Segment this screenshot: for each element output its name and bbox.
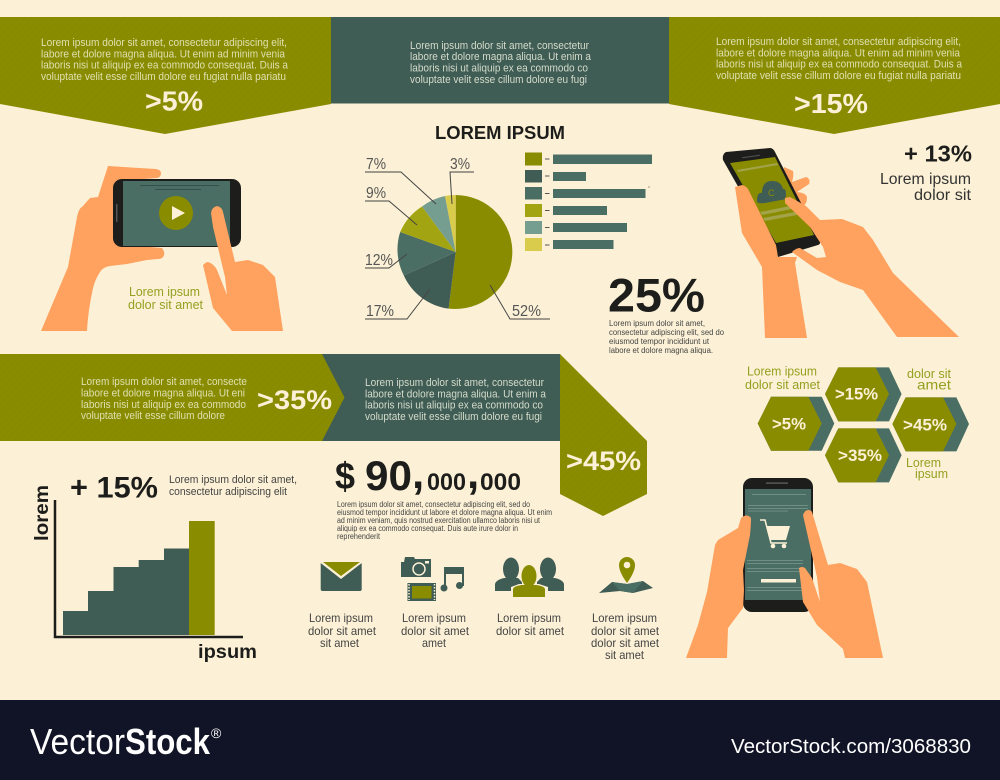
- caption: left phone: dolor sit amet: [128, 297, 203, 312]
- caption: people: Lorem ipsum: [497, 611, 561, 625]
- text: top centre banner copy: [410, 40, 592, 86]
- label: hexagon bottom right: Lorem: [906, 455, 941, 470]
- heading: pie chart title: LOREM IPSUM: [435, 122, 565, 143]
- label: hexagon top right: amet: [917, 376, 951, 392]
- logo: VectorStock: Stock: [125, 721, 211, 762]
- text: 25 percent description: Lorem ipsum dolor sit amet,: [609, 319, 705, 328]
- label: hexagon top left: [745, 364, 820, 392]
- stat: 90 million dollars: [335, 449, 521, 499]
- pie leaders and labels: 9%: [366, 185, 386, 202]
- text: 90 million description: eiusmod tempor incididunt ut labore et dolore magna aliqua. Ut enim: [337, 508, 552, 517]
- stat: plus 13 percent: + 13%: [904, 140, 972, 166]
- text: middle dark banner copy: laboris nisi ut aliquip ex ea commodo co: [365, 400, 543, 412]
- text: 25 percent description: labore et dolore magna aliqua.: [609, 346, 713, 355]
- text: plus 13 percent caption: [880, 171, 972, 204]
- icon: map pin: [599, 557, 653, 593]
- stat: 25 percent: 25%: [608, 268, 705, 322]
- button bar: [761, 579, 796, 582]
- caption: media: amet: [422, 636, 447, 650]
- hexagon: 5 percent: [758, 397, 834, 451]
- illustration: hands holding tilted phone: [723, 148, 959, 338]
- label: hexagon top right: dolor sit: [907, 366, 951, 381]
- text: top right banner copy: laboris nisi ut aliquip ex ea commodo consequat. Duis a: [716, 58, 963, 70]
- label: hexagon top left: Lorem ipsum: [747, 364, 817, 378]
- logo: VectorStock: [30, 721, 222, 762]
- pie leaders and labels: 7%: [366, 156, 386, 173]
- pie leaders and labels: 3%: [450, 156, 470, 173]
- text: middle dark banner copy: Lorem ipsum dolor sit amet, consectetur: [365, 377, 544, 389]
- slice 3 percent: [445, 195, 456, 252]
- logo: VectorStock: ®: [211, 725, 222, 741]
- caption: media: [401, 611, 470, 650]
- text: 90 million description: aliquip ex ea commodo consequat. Duis aute irure dolor in: [337, 524, 518, 533]
- axis label: ipsum: ipsum: [198, 641, 257, 663]
- caption: people: [496, 611, 565, 638]
- panel: middle dark banner: [322, 354, 560, 441]
- label: hexagon top left: dolor sit amet: [745, 377, 820, 392]
- text: middle olive banner copy: laboris nisi ut aliquip ex ea commodo: [81, 399, 246, 411]
- label: hexagon bottom right: ipsum: [915, 466, 948, 481]
- panel: top right banner: [669, 17, 1000, 134]
- text: middle dark banner copy: voluptate velit esse cillum dolore eu fugi: [365, 411, 542, 423]
- text: top right banner copy: Lorem ipsum dolor sit amet, consectetur adipiscing elit,: [716, 36, 961, 48]
- stat: 15 percent: >15%: [794, 88, 868, 119]
- stat: 5 percent: >5%: [145, 86, 203, 116]
- caption: media: dolor sit amet: [401, 624, 470, 638]
- text: top left banner copy: labore et dolore magna aliqua. Ut enim ad minim venia: [41, 48, 286, 60]
- footer bar: [0, 700, 1000, 780]
- hexagon: 15 percent: >15%: [835, 384, 878, 404]
- text: plus 15 percent description: consectetur adipiscing elit: [169, 486, 287, 498]
- text: 25 percent description: eiusmod tempor incididunt ut: [609, 337, 710, 346]
- icon: camera film and music: [401, 557, 463, 601]
- panel: 45 percent ribbon: [560, 354, 647, 516]
- axis label: lorem: lorem: [31, 485, 53, 541]
- text: middle olive banner copy: labore et dolore magna aliqua. Ut eni: [81, 388, 245, 400]
- panel: top left banner: [0, 17, 331, 134]
- caption: left phone: Lorem ipsum: [129, 284, 200, 299]
- footer url: VectorStock.com/3068830: [731, 736, 971, 758]
- icon: people group: [495, 558, 564, 598]
- text: plus 15 percent description: [169, 474, 297, 498]
- caption: people: dolor sit amet: [496, 624, 565, 638]
- label: hexagon top right: [907, 366, 951, 392]
- text: plus 13 percent caption: dolor sit: [914, 187, 972, 204]
- text: top left banner copy: Lorem ipsum dolor sit amet, consectetur adipiscing elit,: [41, 37, 287, 49]
- text: top right banner copy: [716, 36, 963, 82]
- icon: cloud: [757, 181, 786, 203]
- text: middle olive banner copy: voluptate velit esse cillum dolore: [81, 410, 225, 422]
- pie leaders and labels: [365, 156, 550, 320]
- text: middle dark banner copy: labore et dolore magna aliqua. Ut enim a: [365, 388, 547, 400]
- chart: hexagon cluster: [758, 367, 969, 482]
- hexagon: 35 percent: >35%: [838, 446, 882, 465]
- text: top right banner copy: voluptate velit esse cillum dolore eu fugiat nulla pariatu: [716, 70, 961, 82]
- pie leaders and labels: 52%: [512, 303, 541, 320]
- illustration: hands holding landscape phone: [41, 166, 283, 331]
- logo: VectorStock: Vector: [30, 721, 125, 762]
- illustration: hands holding tilted phone: C: [768, 188, 775, 198]
- icon: play button: [159, 196, 193, 230]
- text: middle olive banner copy: Lorem ipsum dolor sit amet, consecte: [81, 376, 247, 388]
- chart: stepped bars: [31, 485, 257, 663]
- illustration: hands holding shopping phone: [686, 478, 883, 658]
- chart: legend bars: [525, 152, 652, 251]
- stat: 90 million dollars: ,: [467, 449, 479, 498]
- text: top centre banner copy: voluptate velit esse cillum dolore eu fugi: [410, 74, 587, 86]
- stat: 90 million dollars: 90: [365, 452, 412, 499]
- text: middle olive banner copy: [81, 376, 247, 422]
- caption: map: dolor sit amet: [591, 636, 660, 650]
- caption: map: dolor sit amet: [591, 624, 660, 638]
- stat: 90 million dollars: $: [335, 456, 355, 498]
- icon: shopping cart: [760, 520, 790, 548]
- stat: 35 percent: >35%: [257, 385, 332, 415]
- hexagon: 15 percent: [825, 367, 902, 421]
- caption: envelope: sit amet: [320, 636, 360, 650]
- slice 52 percent: [449, 195, 512, 309]
- text: 25 percent description: consectetur adipiscing elit, sed do: [609, 328, 725, 337]
- caption: media: Lorem ipsum: [402, 611, 466, 625]
- slice 7 percent: [422, 196, 456, 252]
- text: top centre banner copy: laboris nisi ut aliquip ex ea commodo co: [410, 62, 588, 74]
- text: top left banner copy: voluptate velit esse cillum dolore eu fugiat nulla pariatu: [41, 71, 286, 83]
- slice 12 percent: [397, 232, 456, 276]
- caption: envelope: [308, 611, 377, 650]
- stat: 45 percent: >45%: [566, 446, 641, 476]
- text: 90 million description: [337, 500, 552, 541]
- slice 9 percent: [400, 206, 456, 252]
- text: 90 million description: ad minim veniam, quis nostrud exercitation ullamco laboris nisi ut: [337, 516, 541, 525]
- pie leaders and labels: 12%: [365, 252, 393, 269]
- pie leaders and labels: 17%: [366, 303, 394, 320]
- text: 90 million description: Lorem ipsum dolor sit amet, consectetur adipiscing elit, sed do: [337, 500, 530, 509]
- chart: pie: [365, 156, 550, 320]
- caption: envelope: Lorem ipsum: [309, 611, 373, 625]
- text: 90 million description: reprehenderit: [337, 532, 381, 541]
- stat: 90 million dollars: ,: [412, 449, 424, 498]
- text: 25 percent description: [609, 319, 725, 355]
- panel: top centre banner: [331, 17, 669, 104]
- hexagon: 45 percent: [892, 397, 969, 451]
- slice 17 percent: [404, 252, 456, 309]
- text: top right banner copy: labore et dolore magna aliqua. Ut enim ad minim venia: [716, 48, 961, 60]
- text: plus 15 percent description: Lorem ipsum dolor sit amet,: [169, 474, 297, 486]
- hexagon: 35 percent: [825, 428, 902, 482]
- text: top left banner copy: laboris nisi ut aliquip ex ea commodo consequat. Duis a: [41, 60, 289, 72]
- text: top centre banner copy: Lorem ipsum dolor sit amet, consectetur: [410, 40, 589, 52]
- text: top centre banner copy: labore et dolore magna aliqua. Ut enim a: [410, 51, 592, 63]
- label: hexagon bottom right: [906, 455, 948, 481]
- caption: map: sit amet: [605, 648, 645, 662]
- caption: map: [591, 611, 660, 662]
- caption: left phone: [128, 284, 203, 312]
- caption: envelope: dolor sit amet: [308, 624, 377, 638]
- hexagon: 45 percent: >45%: [903, 416, 947, 434]
- text: top left banner copy: [41, 37, 289, 83]
- caption: map: Lorem ipsum: [592, 611, 657, 625]
- text: middle dark banner copy: [365, 377, 547, 423]
- text: plus 13 percent caption: Lorem ipsum: [880, 171, 971, 188]
- stat: plus 15 percent: + 15%: [70, 472, 158, 504]
- panel: middle olive arrow banner: [0, 354, 344, 441]
- hexagon: 5 percent: >5%: [772, 414, 806, 434]
- stat: 90 million dollars: 000: [427, 469, 466, 496]
- stat: 90 million dollars: 000: [480, 469, 521, 496]
- icon: envelope: [321, 562, 362, 591]
